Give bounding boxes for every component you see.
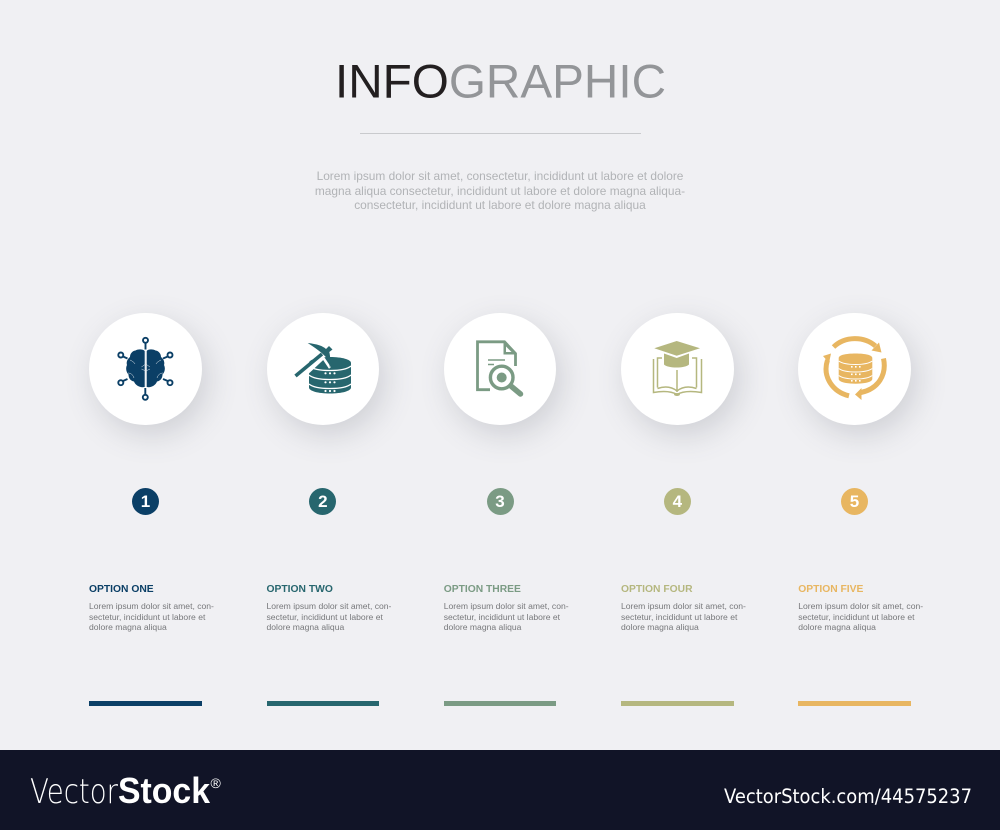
intro text: magna aliqua consectetur, incididunt ut labore et dolore magna aliqua-	[315, 184, 685, 198]
text block: option two: OPTION TWO	[266, 584, 333, 594]
number badge 4: 4	[673, 492, 682, 510]
accent bar 3	[444, 701, 556, 706]
accent bar 5	[798, 701, 911, 706]
number badge 4	[664, 488, 691, 514]
footer logo: Stock	[118, 770, 211, 811]
number badge 1	[132, 488, 159, 514]
text block: option three: OPTION THREE	[444, 584, 521, 594]
text block: option four: Lorem ipsum dolor sit amet, con-	[621, 601, 746, 611]
footer band	[0, 750, 1000, 830]
number badge 2	[309, 488, 336, 514]
text block: option four	[621, 584, 746, 632]
title: INFOGRAPHIC	[335, 54, 666, 108]
text block: option three	[444, 584, 569, 632]
panel: icon circle 5	[798, 312, 911, 425]
panel: icon circle 4	[621, 312, 734, 425]
text block: option three: dolore magna aliqua	[444, 622, 521, 632]
text block: option two: Lorem ipsum dolor sit amet, con-	[266, 601, 391, 611]
text block: option one	[89, 584, 214, 632]
footer logo: ®	[210, 775, 222, 791]
number badge 2: 2	[318, 492, 328, 510]
intro text	[315, 169, 685, 212]
accent bar 4	[621, 701, 734, 706]
panel: icon circle 2	[266, 312, 379, 425]
text block: option one: sectetur, incididunt ut labore et	[89, 612, 205, 622]
text block: option one: Lorem ipsum dolor sit amet, con-	[89, 601, 214, 611]
accent bar 2	[266, 701, 379, 706]
footer logo: Vector	[30, 772, 118, 812]
footer image id: VectorStock.com/44575237	[724, 785, 972, 808]
text block: option five: dolore magna aliqua	[798, 622, 876, 632]
number badge 5: 5	[850, 492, 859, 510]
text block: option one: OPTION ONE	[89, 584, 154, 594]
number badge 5	[841, 488, 868, 514]
footer logo	[30, 770, 222, 812]
number badge 3: 3	[495, 492, 505, 510]
text block: option four: sectetur, incididunt ut labore et	[621, 612, 737, 622]
text block: option two: dolore magna aliqua	[266, 622, 344, 632]
text block: option five: Lorem ipsum dolor sit amet, con-	[798, 601, 923, 611]
text block: option four: OPTION FOUR	[621, 584, 693, 594]
text block: option five: sectetur, incididunt ut labore et	[798, 612, 915, 622]
number badge 1: 1	[141, 492, 150, 510]
text block: option four: dolore magna aliqua	[621, 622, 699, 632]
text block: option five: OPTION FIVE	[798, 584, 863, 594]
panel: icon circle 3	[444, 312, 556, 425]
text block: option three: Lorem ipsum dolor sit amet, con-	[444, 601, 569, 611]
text block: option three: sectetur, incididunt ut labore et	[444, 612, 560, 622]
number badge 3	[486, 488, 514, 514]
intro text: consectetur, incididunt ut labore et dolore magna aliqua	[354, 198, 646, 212]
text block: option two: sectetur, incididunt ut labore et	[266, 612, 383, 622]
text block: option one: dolore magna aliqua	[89, 622, 167, 632]
text block: option five	[798, 584, 923, 632]
text block: option two	[266, 584, 391, 632]
panel: icon circle 1	[89, 312, 202, 425]
accent bar 1	[89, 701, 202, 706]
intro text: Lorem ipsum dolor sit amet, consectetur, incididunt ut labore et dolore	[317, 169, 683, 183]
